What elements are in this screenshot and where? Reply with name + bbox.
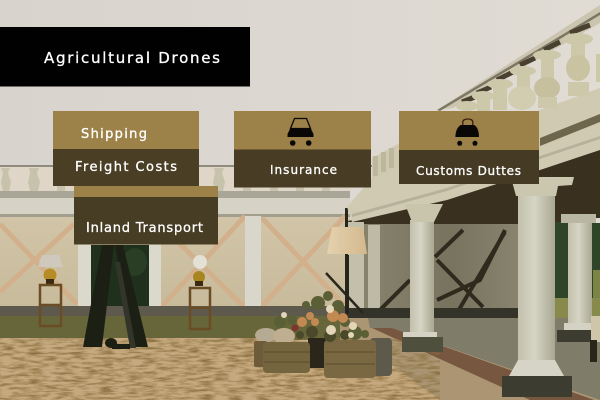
front column	[502, 177, 574, 397]
icon: bag on wheels	[455, 119, 479, 146]
black tripod stand	[83, 245, 148, 349]
icon: car	[288, 118, 314, 146]
distant left balustrade	[0, 165, 372, 192]
foreground shaggy carpet	[0, 338, 440, 400]
porch back wall	[345, 208, 557, 318]
panel: customs duties	[399, 111, 539, 184]
trees and lawn at the right edge	[555, 218, 600, 322]
label: inland transport: Inland Transport	[86, 221, 203, 236]
panel: inland transport	[74, 186, 218, 244]
label: customs duttes: Customs Duttes	[416, 164, 521, 178]
sloped upper balustrade	[372, 5, 600, 180]
floor lamp	[326, 227, 367, 313]
rear column	[557, 214, 596, 342]
label: insurance: Insurance	[270, 163, 337, 177]
rug ground under the porch	[340, 318, 600, 400]
left table lamp	[38, 255, 63, 326]
panel: insurance	[234, 111, 371, 188]
middle column	[402, 204, 443, 352]
flower arrangement with stone planters	[254, 291, 392, 378]
lawn	[0, 316, 380, 340]
porch stone floor	[368, 318, 600, 400]
dark porch ceiling	[345, 145, 600, 228]
chair at the right edge	[590, 316, 600, 362]
label: freight costs: Freight Costs	[75, 160, 177, 175]
garden wall	[0, 191, 350, 316]
panel: shipping and freight costs	[53, 111, 199, 186]
title banner	[0, 27, 250, 86]
title text: Agricultural Drones	[44, 49, 220, 67]
sloped porch beam	[347, 88, 600, 222]
patterned red rug strip	[372, 328, 600, 400]
right table lamp	[190, 255, 210, 329]
label: shipping: Shipping	[81, 127, 147, 142]
